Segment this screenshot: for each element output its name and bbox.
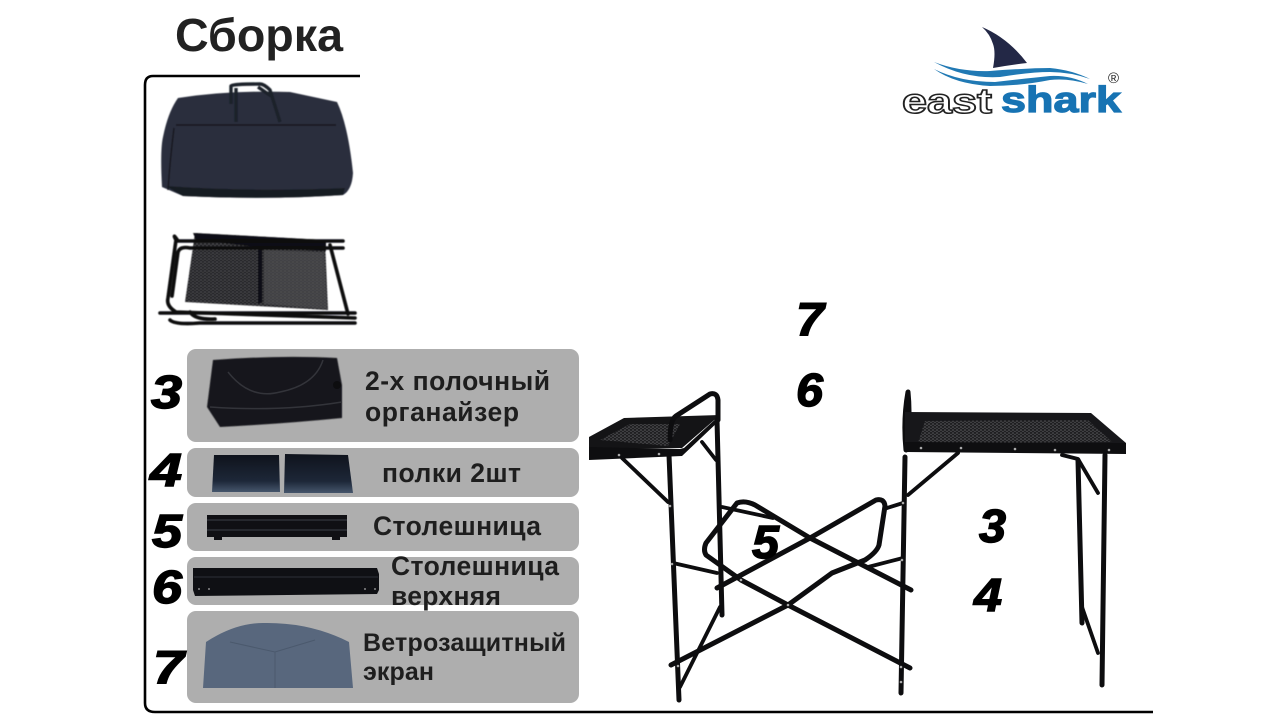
wind screen photo xyxy=(203,623,353,688)
organizer label: органайзер xyxy=(365,397,519,427)
logo fin xyxy=(982,27,1027,68)
bolts xyxy=(669,502,904,683)
left shelf xyxy=(589,415,720,460)
organizer label: 2-х полочный xyxy=(365,366,550,396)
registered mark: ® xyxy=(1108,70,1119,87)
panel: upper tabletop xyxy=(152,551,579,613)
wind screen label: Ветрозащитный xyxy=(363,629,566,657)
folding x-frame xyxy=(704,502,911,668)
shelves label: полки 2шт xyxy=(382,458,521,488)
left braces xyxy=(622,442,773,687)
tabletop xyxy=(904,412,1126,454)
tabletop label: Столешница xyxy=(373,511,541,541)
organizer photo xyxy=(207,357,342,427)
upper tabletop label: Столешница xyxy=(391,551,559,581)
panel: wind screen xyxy=(153,611,579,703)
tabletop photo xyxy=(207,515,347,540)
diagram number 3: 3 xyxy=(979,500,1006,552)
number 3: 3 xyxy=(151,366,182,418)
logo word shark: shark xyxy=(1001,79,1122,120)
wind screen label: экран xyxy=(363,658,434,686)
panel: shelves xyxy=(149,444,579,497)
diagram number 4: 4 xyxy=(973,569,1002,621)
left post and handle xyxy=(669,394,722,700)
wind screen label xyxy=(363,629,566,686)
table braces and legs xyxy=(908,453,1098,653)
number 7: 7 xyxy=(153,641,187,693)
photo: folded table xyxy=(160,233,355,324)
panel: organizer xyxy=(151,349,579,442)
upper tabletop label xyxy=(391,551,559,611)
shelves photo xyxy=(212,454,353,493)
upper tabletop photo xyxy=(193,568,379,596)
number 4: 4 xyxy=(149,444,182,496)
logo: east shark xyxy=(902,27,1122,121)
logo waves xyxy=(934,62,1090,86)
number 5: 5 xyxy=(152,505,184,557)
right post and handle xyxy=(901,392,909,693)
frame xyxy=(145,76,1153,712)
diagram number 7: 7 xyxy=(796,293,827,345)
diagram number 5: 5 xyxy=(752,516,780,568)
panel: tabletop xyxy=(152,503,579,557)
diagram number 6: 6 xyxy=(796,364,823,416)
upper tabletop label: верхняя xyxy=(391,581,501,611)
photo: carry bag xyxy=(161,84,353,198)
number 6: 6 xyxy=(152,561,182,613)
logo word east: east xyxy=(902,82,992,121)
photo: assembled table xyxy=(589,392,1126,700)
organizer label xyxy=(365,366,550,427)
title: Сборка xyxy=(175,9,343,61)
